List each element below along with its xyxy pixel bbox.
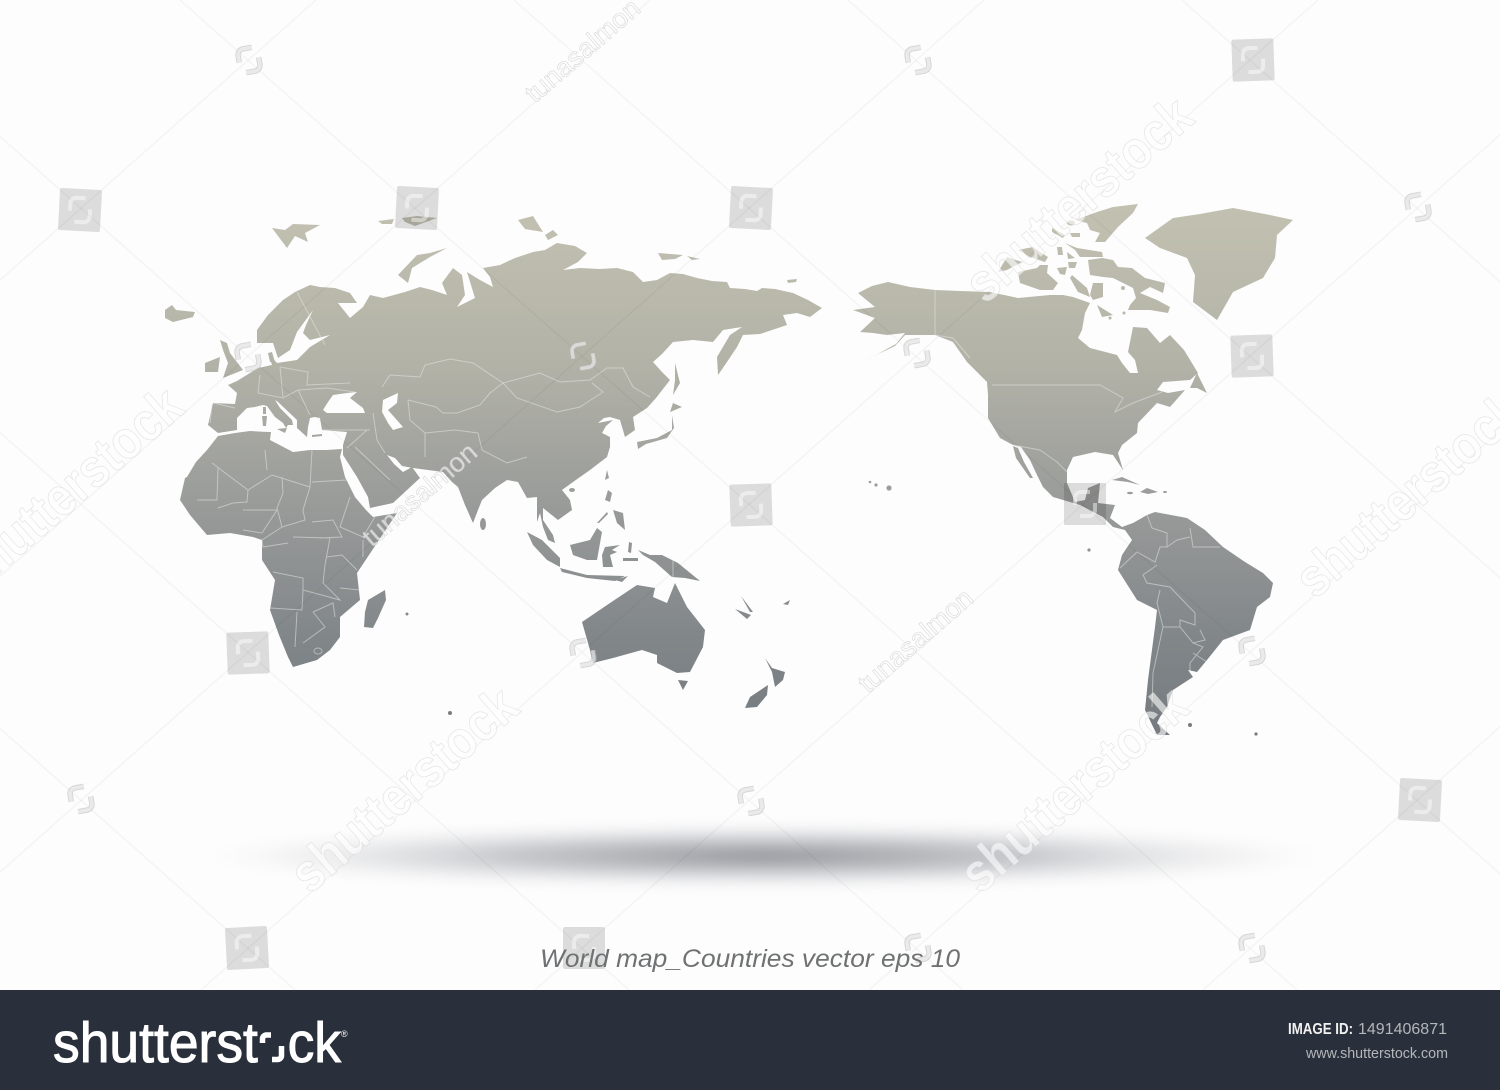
- watermark: square logo tiles: [58, 38, 1442, 970]
- watermark: shutterstock diagonal text: shutterstock: [949, 675, 1200, 904]
- island: Tasmania: [678, 680, 688, 690]
- country borders: [197, 290, 1220, 707]
- landmass: Eurasia: [208, 243, 822, 543]
- footer bar: [0, 990, 1500, 1090]
- watermark: small outline logos: [69, 46, 1430, 962]
- watermark: shutterstock diagonal text: shutterstock: [954, 85, 1205, 314]
- watermark: tunasalmon diagonal text: [356, 0, 979, 699]
- watermark: tunasalmon diagonal text: tunasalmon: [356, 437, 483, 553]
- island: Madagascar: [364, 590, 386, 628]
- islands: Caribbean: [886, 477, 1167, 552]
- footer logo: shutterstock: shutterstock: [53, 1011, 341, 1075]
- islands: Indonesia, Philippines and New Guinea: [527, 490, 790, 619]
- sea: Black Sea: [323, 392, 365, 413]
- peninsula: Baja California: [1013, 446, 1033, 478]
- landmass: North, Central and South America: [852, 282, 1273, 735]
- world map: [165, 204, 1293, 736]
- island: Newfoundland: [1190, 373, 1207, 393]
- island: Falklands and small dots: [406, 481, 1258, 736]
- landmass: Australia: [582, 583, 705, 673]
- islands: Japan, Sakhalin, Taiwan, Hainan: [569, 363, 682, 492]
- footer image id label: IMAGE ID:: [1288, 1021, 1353, 1038]
- islands: Canadian Arctic: [998, 204, 1170, 320]
- island: Greenland: [1145, 208, 1293, 320]
- islands: Britain, Ireland, Mediterranean: [205, 340, 322, 437]
- footer image id number: 1491406871: [1358, 1021, 1447, 1038]
- island: Iceland: [165, 305, 195, 322]
- caption: World map_Countries vector eps 10: [540, 945, 960, 973]
- islands: New Zealand: [745, 658, 785, 708]
- watermark: shutterstock diagonal text: shutterstock: [279, 675, 530, 904]
- floating shadow under the map: [170, 822, 1360, 890]
- island: Sri Lanka: [480, 518, 486, 530]
- footer registered mark: ®: [341, 1029, 348, 1039]
- watermark: tunasalmon diagonal text: tunasalmon: [852, 583, 979, 699]
- sea: Caspian: [382, 393, 403, 430]
- footer url: www.shutterstock.com: [1305, 1046, 1448, 1062]
- islands: Arctic Russia: [378, 216, 797, 283]
- island: Svalbard: [272, 224, 320, 248]
- landmass: Africa: [180, 431, 397, 667]
